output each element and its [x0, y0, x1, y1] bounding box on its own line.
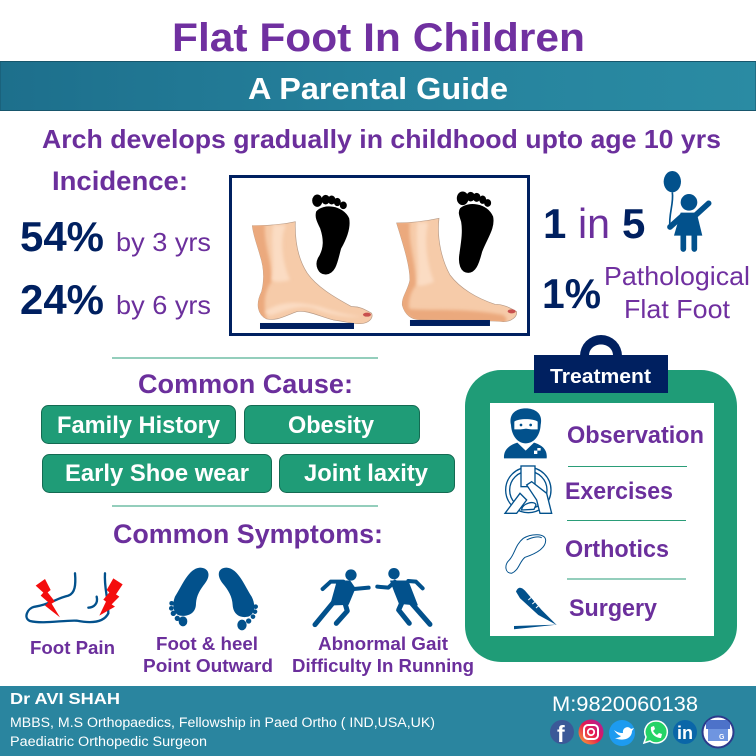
symptom icons — [26, 568, 430, 630]
icon: instagram — [578, 720, 604, 744]
symptom labels: Difficulty In Running — [292, 656, 474, 676]
icon: running figures — [315, 568, 430, 625]
cause pills — [42, 406, 454, 492]
stat: 24% by 6 yrs: by 6 yrs — [116, 290, 211, 320]
title: Flat Foot In Children — [172, 16, 585, 60]
doctor credentials: MBBS, M.S Orthopaedics, Fellowship in Paed Ortho ( IND,USA,UK) — [10, 715, 435, 730]
incidence heading: Incidence: — [52, 166, 188, 196]
treatment heading: Treatment — [550, 366, 651, 388]
ground bars — [260, 320, 490, 329]
flat foot — [395, 192, 517, 323]
stat: 1% pathological flat foot: Flat Foot — [624, 294, 731, 324]
stat: 1 in 5: in — [578, 200, 610, 247]
doctor name: Dr AVI SHAH — [10, 691, 120, 708]
treatment: surgery: Surgery — [569, 595, 658, 622]
panel: foot comparison — [230, 176, 528, 334]
left toenail — [363, 313, 371, 317]
normal arched foot — [250, 195, 372, 324]
stat: 24% by 6 yrs: 24% — [20, 276, 104, 323]
icon: google my business — [702, 716, 734, 748]
symptom labels: Foot & heel — [156, 634, 258, 654]
subtitle banner: A Parental Guide — [248, 71, 508, 106]
treatment: observation: Observation — [567, 422, 704, 449]
stat: 54% by 3 yrs: by 3 yrs — [116, 227, 211, 257]
icon: twitter — [609, 720, 635, 746]
subtitle banner — [0, 62, 756, 110]
doctor credentials — [10, 715, 435, 749]
common symptoms heading: Common Symptoms: — [113, 519, 383, 549]
pill: early shoe wear: Early Shoe wear — [65, 460, 249, 487]
treatment: orthotics: Orthotics — [565, 536, 669, 563]
pill: obesity — [244, 406, 420, 444]
panel: treatment clipboard — [465, 335, 737, 662]
stat: 24% by 6 yrs — [20, 276, 211, 323]
icon: foot pain — [26, 573, 123, 622]
social icons — [550, 716, 734, 748]
symptom labels: Abnormal Gait — [318, 634, 448, 654]
stat: 1% pathological flat foot — [542, 261, 750, 324]
stat: 1% pathological flat foot: 1% — [542, 270, 601, 317]
footer — [0, 686, 756, 756]
icon: linkedin: in — [677, 723, 693, 743]
treatment: exercises: Exercises — [565, 478, 673, 505]
icon: scalpel — [514, 588, 557, 629]
stat: 1 in 5: 1 — [543, 200, 566, 247]
footprint with arch — [313, 195, 349, 274]
pill: joint laxity: Joint laxity — [304, 460, 429, 487]
icon: child with balloon — [664, 171, 709, 249]
icon: facebook: f — [557, 721, 565, 747]
incidence panel — [20, 166, 211, 323]
icon: foot exercises — [505, 466, 552, 513]
pill: family history: Family History — [57, 412, 221, 439]
arch development heading: Arch develops gradually in childhood upto age 10 yrs — [42, 124, 721, 154]
stat: 1 in 5 — [543, 200, 645, 247]
stat: 1% pathological flat foot: Pathological — [604, 261, 750, 291]
pill: early shoe wear — [42, 454, 272, 492]
icon: orthotic insole — [506, 535, 546, 573]
phone number: M:9820060138 — [552, 693, 698, 716]
common cause heading: Common Cause: — [138, 369, 353, 399]
icon: facebook — [550, 720, 574, 747]
icon: surgeon — [504, 408, 547, 458]
pill: obesity: Obesity — [288, 412, 375, 439]
stat: 1 in 5: 5 — [622, 200, 645, 247]
symptom labels — [30, 634, 474, 676]
stat: 54% by 3 yrs: 54% — [20, 213, 104, 260]
icon: whatsapp — [644, 721, 667, 743]
icon: google my business: G — [719, 734, 725, 741]
icon: feet pointing outward — [169, 568, 258, 630]
symptom labels: Point Outward — [143, 656, 273, 676]
doctor credentials: Paediatric Orthopedic Surgeon — [10, 734, 207, 749]
symptom labels: Foot Pain — [30, 638, 115, 658]
right toenail — [508, 309, 516, 313]
pill: joint laxity — [280, 454, 454, 492]
flat footprint — [457, 192, 493, 272]
pill: family history — [42, 406, 236, 444]
stat: 54% by 3 yrs — [20, 213, 211, 260]
icon: linkedin — [673, 720, 697, 744]
